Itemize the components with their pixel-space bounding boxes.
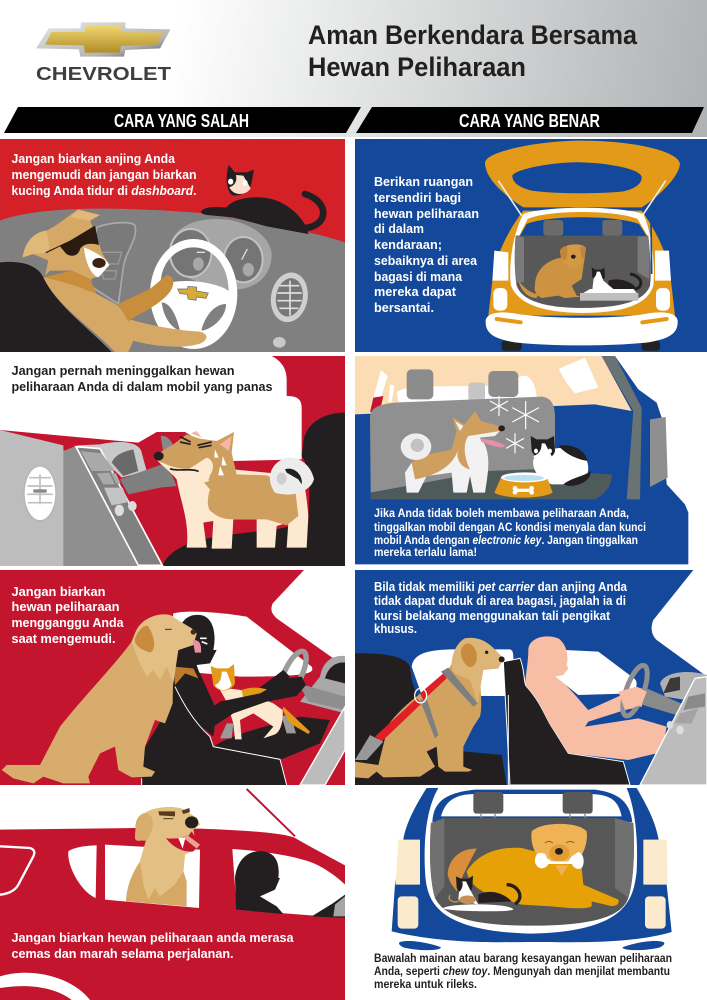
panel: dog driving, cat on dashboard xyxy=(0,139,345,352)
text: anxiety warning xyxy=(12,930,294,961)
panel: pets in the luggage area xyxy=(355,139,707,352)
text: pets in luggage area: di dalam xyxy=(374,221,424,236)
banner: cara yang salah xyxy=(4,107,361,133)
text: anxiety warning: cemas dan marah selama perjalanan. xyxy=(12,946,234,961)
text: harness advice xyxy=(374,579,628,636)
panel: dog out of the car window xyxy=(0,789,345,1000)
panel: dog in hot car xyxy=(0,356,345,566)
text: hot car warning: Jangan pernah meninggalkan hewan xyxy=(12,363,235,378)
header background xyxy=(0,0,707,137)
text: AC instructions: Jika Anda tidak boleh membawa peliharaan Anda, xyxy=(374,508,629,520)
Chevrolet logo xyxy=(36,22,171,84)
panel: AC on with electronic key xyxy=(355,356,707,566)
title: Aman Berkendara Bersama xyxy=(308,20,638,50)
text: dog driving: Jangan biarkan anjing Anda xyxy=(12,151,176,166)
text: don't disturb driver: Jangan biarkan xyxy=(12,584,106,599)
text: dog driving: mengemudi dan jangan biarkan xyxy=(12,167,197,182)
text: anxiety warning: Jangan biarkan hewan peliharaan anda merasa xyxy=(12,930,294,945)
text: don't disturb driver: mengganggu Anda xyxy=(12,615,124,630)
text: don't disturb driver: hewan peliharaan xyxy=(12,599,120,614)
text: dog driving: kucing Anda tidur di dashboard. xyxy=(12,183,196,198)
title xyxy=(308,20,638,82)
text: don't disturb driver xyxy=(12,584,124,646)
text: pets in luggage area: mereka dapat xyxy=(374,284,457,299)
text: hot car warning xyxy=(12,363,272,394)
text: harness advice: tidak dapat duduk di area bagasi, jagalah ia di xyxy=(374,593,626,608)
text: don't disturb driver: saat mengemudi. xyxy=(12,631,116,646)
panel: dog with safety harness xyxy=(355,570,707,785)
text: harness advice: Bila tidak memiliki pet carrier dan anjing Anda xyxy=(374,579,628,594)
text: chew toy advice: mereka untuk rileks. xyxy=(374,979,477,991)
panel: pets disturbing the driver xyxy=(0,570,345,785)
text: pets in luggage area: tersendiri bagi xyxy=(374,190,461,205)
text: dog driving xyxy=(12,151,197,198)
banner: cara yang benar xyxy=(356,107,704,133)
text: pets in luggage area: hewan peliharaan xyxy=(374,206,479,221)
panel: toys for pets xyxy=(374,788,672,991)
text: harness advice: khusus. xyxy=(374,621,417,636)
text: pets in luggage area: bagasi di mana xyxy=(374,269,463,284)
text: AC instructions: tinggalkan mobil dengan AC kondisi menyala dan kunci xyxy=(374,522,646,534)
title: Hewan Peliharaan xyxy=(308,52,526,82)
text: chew toy advice: Bawalah mainan atau barang kesayangan hewan peliharaan xyxy=(374,953,672,965)
banner: cara yang benar: CARA YANG BENAR xyxy=(459,111,600,131)
text: pets in luggage area: bersantai. xyxy=(374,300,434,315)
text: AC instructions xyxy=(374,508,646,559)
text: harness advice: kursi belakang menggunakan tali pengikat xyxy=(374,608,611,623)
text: chew toy advice xyxy=(374,953,672,991)
text: chew toy advice: Anda, seperti chew toy. Mengunyah dan menjilat membantu xyxy=(374,966,670,978)
banner: cara yang salah: CARA YANG SALAH xyxy=(114,111,249,131)
text: pets in luggage area: Berikan ruangan xyxy=(374,174,473,189)
text: AC instructions: mereka terlalu lama! xyxy=(374,547,477,559)
text: AC instructions: mobil Anda dengan electronic key. Jangan tinggalkan xyxy=(374,535,638,547)
text: pets in luggage area: sebaiknya di area xyxy=(374,253,478,268)
text: pets in luggage area: kendaraan; xyxy=(374,237,442,252)
text: hot car warning: peliharaan Anda di dalam mobil yang panas xyxy=(12,379,272,394)
text: pets in luggage area xyxy=(374,174,479,315)
Chevrolet logo: CHEVROLET xyxy=(36,64,171,84)
